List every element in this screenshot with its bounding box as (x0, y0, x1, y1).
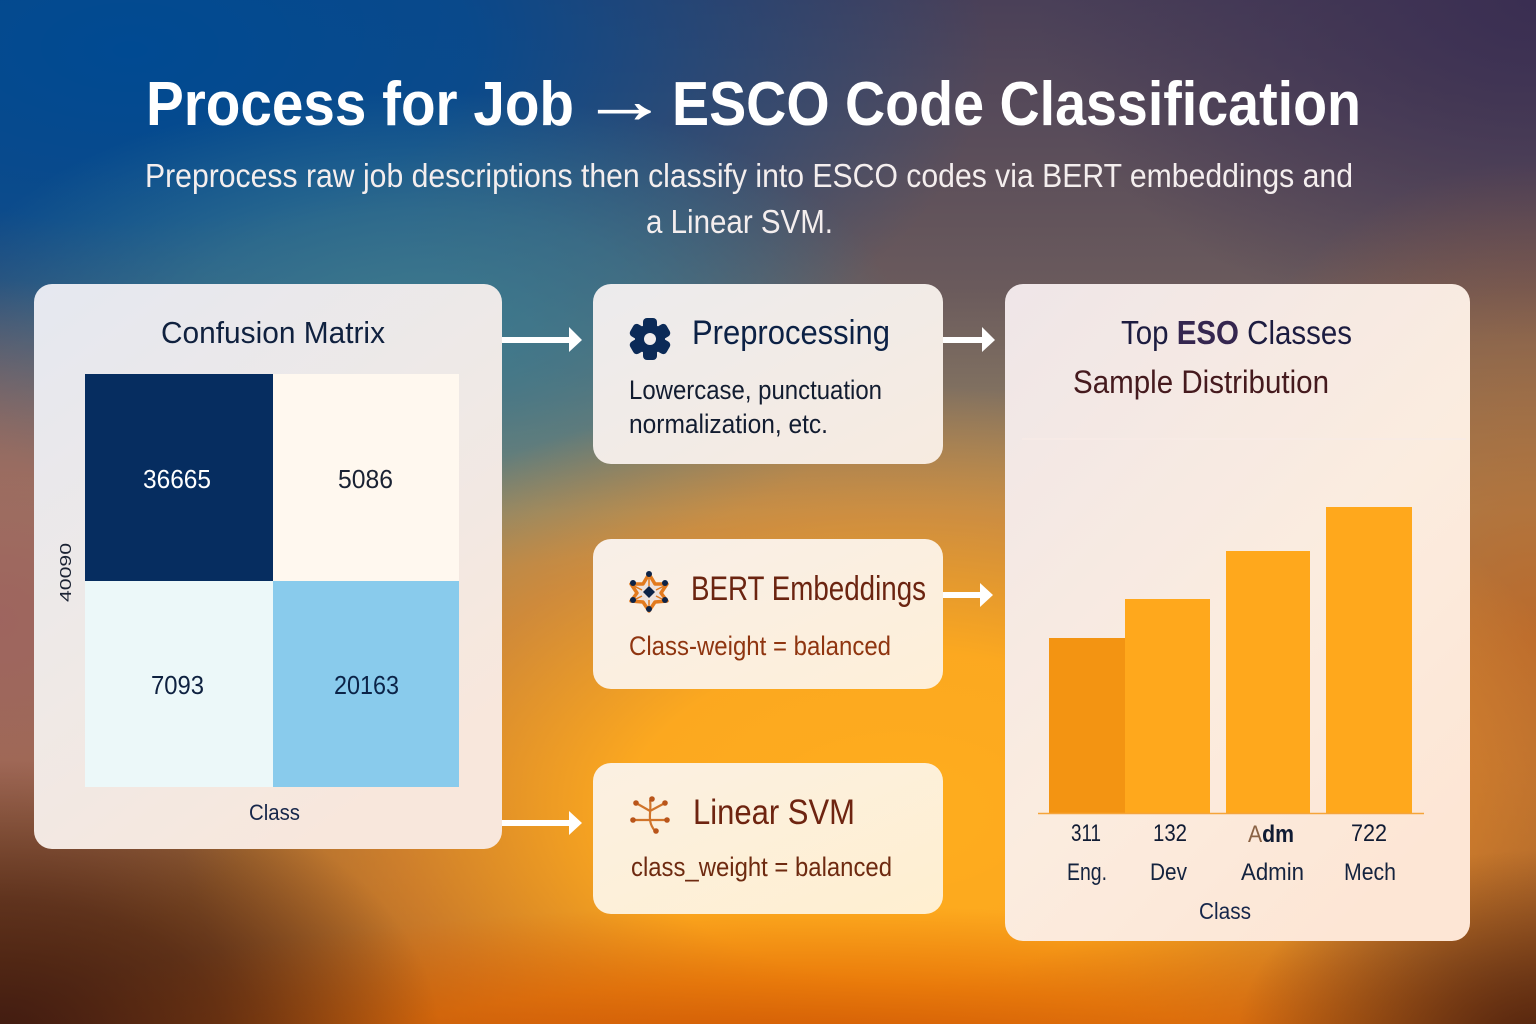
bar category labels: Eng. (1067, 859, 1107, 886)
y axis label: 40090 (58, 543, 75, 602)
subtitle: Preprocess raw job descriptions then classify into ESCO codes via BERT embeddings and (145, 157, 1353, 194)
description: bert embeddings: Class-weight = balanced (629, 631, 891, 661)
bar category labels: Admin (1241, 859, 1304, 886)
panel: linear svm (593, 763, 943, 914)
bar value labels (1071, 820, 1387, 848)
title: ESCO Code Classification (672, 70, 1361, 139)
heading: top eso classes: Top ESO Classes (1121, 314, 1352, 351)
icon: network star (630, 571, 668, 612)
description: preprocessing: Lowercase, punctuation (629, 375, 882, 405)
panel: confusion matrix (34, 284, 502, 849)
bar value labels: 132 (1153, 820, 1187, 847)
bar category labels (1067, 859, 1396, 886)
x axis label: Class (249, 800, 300, 825)
description: preprocessing: normalization, etc. (629, 409, 828, 439)
panel: bert embeddings (593, 539, 943, 689)
x axis label: Class (1199, 898, 1251, 924)
bar chart (1022, 439, 1466, 924)
heatmap: 20163 (334, 670, 399, 700)
heading: bert embeddings: BERT Embeddings (691, 570, 926, 608)
heatmap: 5086 (338, 464, 393, 494)
heatmap: 7093 (151, 670, 204, 700)
heading: linear svm: Linear SVM (693, 793, 855, 832)
heatmap: 36665 (143, 464, 211, 494)
heading: preprocessing: Preprocessing (692, 314, 890, 352)
subtitle (145, 157, 1353, 240)
panel: preprocessing (593, 284, 943, 464)
bar category labels: Dev (1150, 859, 1187, 886)
subheading: sample distribution: Sample Distribution (1073, 364, 1329, 400)
bar value labels: 722 (1351, 820, 1387, 847)
icon: linear svm nodes (630, 796, 670, 834)
title (146, 67, 1361, 139)
title: → (581, 67, 668, 136)
icon: gear (628, 318, 672, 360)
panel: top esco classes (1005, 284, 1470, 941)
bar value labels: Adm (1248, 821, 1294, 848)
bar value labels: 311 (1071, 820, 1101, 847)
subtitle: a Linear SVM. (646, 203, 833, 240)
description: preprocessing (629, 375, 882, 439)
description: linear svm: class_weight = balanced (631, 852, 892, 882)
arrow: bert to classes (943, 583, 993, 607)
heading: confusion matrix: Confusion Matrix (161, 315, 385, 350)
heatmap (85, 374, 459, 787)
title: Process for Job (146, 70, 574, 139)
arrow: matrix to linear svm (502, 811, 582, 835)
bar category labels: Mech (1344, 859, 1396, 886)
arrow: preprocessing to classes (943, 327, 995, 352)
arrow: matrix to preprocessing (502, 327, 582, 352)
